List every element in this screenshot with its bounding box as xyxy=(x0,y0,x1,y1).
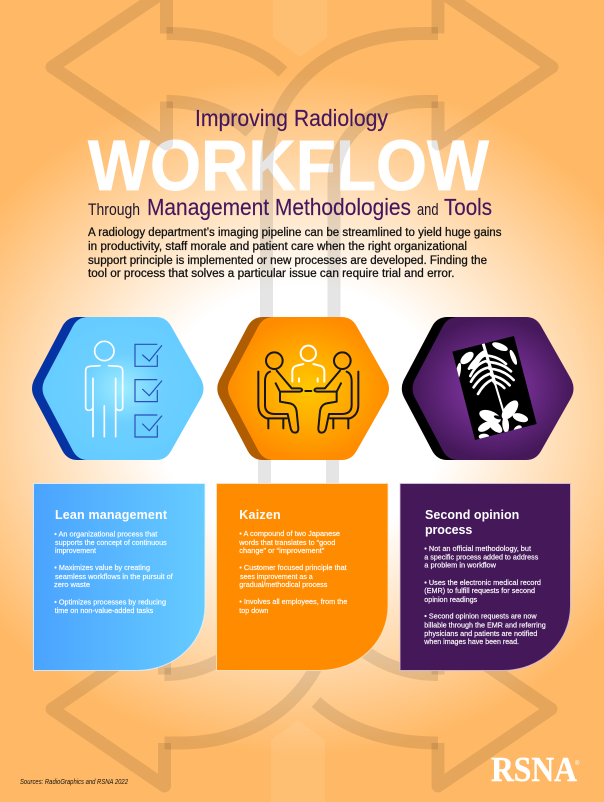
card bullets: • Second opinion requests are now xyxy=(424,611,537,620)
card bullets: words that translates to “good xyxy=(238,538,335,547)
sources note: Sources: RadioGraphics and RSNA 2022 xyxy=(20,779,128,786)
heading: subtitle: and xyxy=(417,200,438,219)
card bullets: zero waste xyxy=(54,580,90,589)
card bullets: • Maximizes value by creating xyxy=(54,563,150,572)
intro paragraph: in productivity, staff morale and patient care when the right organizational xyxy=(88,239,467,253)
card bullets: • Optimizes processes by reducing xyxy=(54,597,166,606)
intro paragraph: A radiology department’s imaging pipeline can be streamlined to yield huge gains xyxy=(88,225,502,239)
icon: meeting xyxy=(258,346,358,433)
card bullets: gradual/methodical process xyxy=(239,580,328,589)
card bullets: • An organizational process that xyxy=(54,529,157,538)
card heading: Kaizen xyxy=(239,508,281,522)
card heading: Lean management xyxy=(55,508,168,522)
card bullets: billable through the EMR and referring xyxy=(424,620,546,629)
hexagon: second opinion xyxy=(402,317,574,460)
background chevron bottom xyxy=(271,720,325,802)
card: kaizen xyxy=(216,484,388,670)
card heading xyxy=(425,508,519,537)
intro paragraph: support principle is implemented or new processes are developed. Finding the xyxy=(88,253,487,267)
card bullets: • Not an official methodology, but xyxy=(424,544,531,553)
heading: Improving Radiology: Improving Radiology xyxy=(195,105,388,131)
heading: subtitle: Management Methodologies xyxy=(147,194,411,220)
card heading: process xyxy=(425,523,472,537)
hexagon: kaizen xyxy=(217,317,389,460)
heading: subtitle: Through xyxy=(88,200,140,219)
card bullets: (EMR) to fulfill requests for second xyxy=(424,586,535,595)
hexagon: lean management xyxy=(32,317,204,460)
card: second opinion xyxy=(400,484,570,670)
card: lean management xyxy=(34,484,205,670)
logo: RSNA: RSNA xyxy=(491,750,578,789)
card heading: Second opinion xyxy=(425,508,519,522)
card bullets: physicians and patients are notified xyxy=(424,629,537,638)
logo: RSNA: ® xyxy=(575,760,580,767)
background chevron top xyxy=(273,0,327,57)
card bullets: supports the concept of continuous xyxy=(55,538,167,547)
card bullets: sees improvement as a xyxy=(240,572,314,581)
card bullets: • Involves all employees, from the xyxy=(239,597,347,606)
intro paragraph: tool or process that solves a particular issue can require trial and error. xyxy=(88,266,454,280)
card bullets: • Customer focused principle that xyxy=(239,563,347,572)
icon: person xyxy=(86,341,123,437)
card bullets: time on non-value-added tasks xyxy=(55,606,154,615)
card bullets xyxy=(54,529,174,615)
card bullets: opinion readings xyxy=(424,595,478,604)
card bullets: seamless workflows in the pursuit of xyxy=(55,572,174,581)
card bullets: improvement xyxy=(55,546,96,555)
intro paragraph xyxy=(88,225,502,280)
card bullets: top down xyxy=(239,606,268,615)
card bullets: change” or “improvement” xyxy=(239,546,325,555)
card bullets: • A compound of two Japanese xyxy=(239,529,340,538)
icon: x-ray xyxy=(452,336,537,440)
heading: subtitle: Tools xyxy=(444,194,492,220)
card bullets: • Uses the electronic medical record xyxy=(424,578,541,587)
card bullets xyxy=(423,544,546,646)
card bullets: when images have been read. xyxy=(423,637,519,646)
title word: WORKFLOW: WORKFLOW xyxy=(88,127,489,206)
card bullets: a specific process added to address xyxy=(424,552,539,562)
card bullets xyxy=(238,529,347,615)
card bullets: a problem in workflow xyxy=(424,561,497,570)
icon: checklist xyxy=(135,344,162,437)
